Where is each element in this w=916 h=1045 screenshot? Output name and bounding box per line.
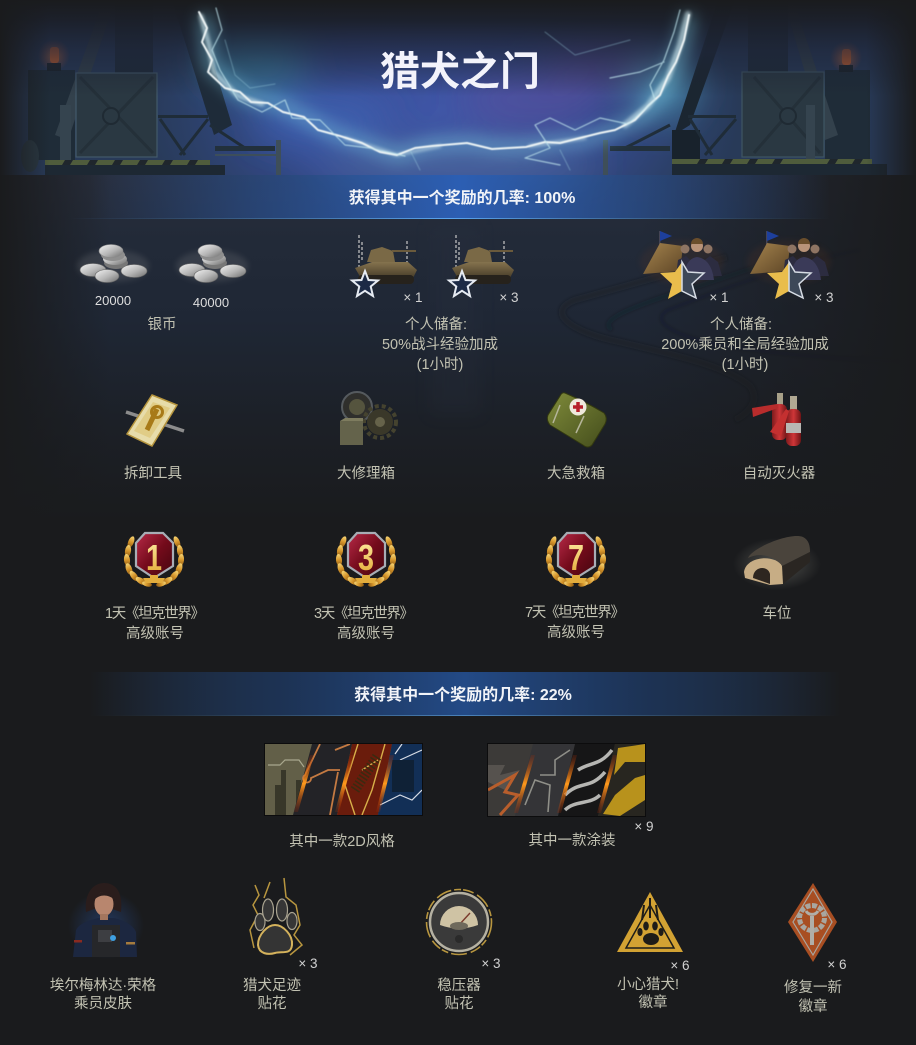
label	[50, 977, 157, 1012]
icon: hangar	[733, 536, 821, 590]
icon: gauge	[426, 890, 492, 954]
label: 小心猎犬!	[617, 976, 679, 993]
label: 猎犬足迹	[243, 977, 301, 994]
label	[617, 976, 679, 1011]
reward: 3 days premium	[314, 533, 414, 642]
label: 高级账号	[337, 625, 395, 642]
reward: 1 day premium	[105, 533, 205, 642]
card frame	[488, 744, 646, 816]
icon: tank reserve x1	[352, 235, 417, 296]
label: 1天《坦克世界》	[105, 605, 205, 622]
portal colour clouds	[200, 24, 697, 179]
left tower	[21, 0, 281, 175]
label: 埃尔梅林达·荣格	[50, 977, 157, 994]
reward: crew skin	[50, 883, 157, 1012]
icon: medal 1: 1	[146, 537, 162, 578]
icon: paw	[250, 878, 302, 955]
hero scene: portal with towers and lightning	[0, 0, 916, 179]
label: 大急救箱	[547, 465, 605, 482]
right tower	[603, 0, 887, 175]
count x9: × 9	[634, 819, 654, 834]
reward: silver coins	[77, 244, 248, 333]
reward: large first aid kit	[547, 393, 606, 482]
card: camouflage swatches	[488, 744, 645, 816]
label: reserve description: (1小时)	[417, 356, 463, 373]
label: reserve description: (1小时)	[722, 356, 768, 373]
banner: 100% reward chance	[70, 175, 830, 219]
count x6: × 6	[670, 958, 690, 973]
label: 稳压器	[437, 977, 481, 994]
count x6: × 6	[827, 957, 847, 972]
label: 7天《坦克世界》	[525, 604, 625, 621]
label	[243, 977, 301, 1012]
left beacon	[38, 39, 70, 71]
icon: wheel, sprocket and box	[340, 392, 396, 445]
reward: garage slot	[733, 536, 821, 622]
label: 车位	[762, 605, 792, 622]
icon: green med bag	[547, 393, 606, 447]
label: reserve description: 200%乘员和全局经验加成	[661, 335, 829, 353]
amount 20000: 20000	[95, 293, 131, 308]
lightning bolts	[199, 8, 689, 170]
icon: ticket and wrench	[126, 395, 184, 446]
star badge	[352, 271, 378, 296]
lightning wisps	[201, 14, 688, 155]
count x3: × 3	[499, 290, 519, 305]
reward: 7 days premium	[525, 533, 625, 641]
star badge half gold	[660, 262, 682, 299]
reward: personal reserve 50% combat XP	[352, 235, 519, 373]
label: 拆卸工具	[124, 465, 182, 482]
label: 贴花	[258, 995, 286, 1012]
card frame	[264, 744, 422, 816]
count x3: × 3	[298, 956, 318, 971]
icon: portrait	[68, 883, 144, 959]
label: reserve description: 50%战斗经验加成	[382, 336, 498, 353]
reward: demounting kit	[124, 395, 184, 482]
label: 乘员皮肤	[74, 995, 132, 1012]
reward: camouflage card	[488, 744, 654, 849]
label: silver: 银币	[148, 316, 176, 333]
vignette over sky	[0, 0, 916, 175]
label	[784, 978, 842, 1015]
label: reserve description: 个人储备:	[405, 316, 467, 333]
hero edge fade right	[866, 0, 916, 175]
reward: beware hound emblem	[617, 892, 690, 1011]
label: 贴花	[444, 995, 474, 1012]
label: 徽章	[638, 993, 668, 1011]
road surface background	[0, 174, 916, 520]
banner: 22% reward chance	[90, 672, 840, 716]
amount 40000: 40000	[193, 295, 229, 310]
label	[105, 605, 205, 642]
count x1: × 1	[709, 290, 729, 305]
label: reserve description: 个人储备:	[710, 316, 772, 333]
label: reserve description	[382, 316, 498, 373]
reward: 2D style card	[264, 744, 422, 850]
hero sky	[0, 0, 916, 175]
reward: hound paw decal	[243, 878, 318, 1012]
icon: coin pile 20000	[77, 244, 149, 282]
reward: automatic fire extinguisher	[743, 393, 816, 482]
title: 猎犬之门	[380, 50, 540, 94]
label	[314, 605, 414, 642]
count x3: × 3	[814, 290, 834, 305]
label: 修复一新	[784, 978, 842, 996]
label	[525, 604, 625, 641]
icon: medal 7: 7	[568, 537, 584, 578]
icon: orange diamond	[788, 883, 837, 962]
lightning glow	[205, 15, 689, 155]
icon: crew reserve x3	[747, 231, 831, 299]
label: 其中一款涂装	[528, 832, 616, 849]
reward: large repair kit	[337, 392, 396, 482]
label: 高级账号	[547, 624, 605, 641]
card: style swatches	[265, 744, 422, 815]
count x1: × 1	[403, 290, 423, 305]
reward: good as new emblem	[784, 883, 847, 1015]
banner: 100% reward chance: 获得其中一个奖励的几率: 100%	[349, 188, 575, 207]
icon: warning triangle	[617, 892, 683, 952]
label: 自动灭火器	[743, 465, 816, 482]
reward: stabilizer decal	[426, 890, 501, 1012]
count x3: × 3	[481, 956, 501, 971]
reward: personal reserve 200% crew XP	[640, 231, 834, 373]
label: 徽章	[798, 997, 828, 1015]
icon: crew reserve x1	[640, 231, 724, 299]
icon: red extinguishers	[752, 393, 801, 446]
icon: coin pile 40000	[176, 244, 248, 282]
label: reserve description	[661, 316, 829, 373]
icon: tank reserve x3	[449, 235, 514, 296]
banner: 22% reward chance: 获得其中一个奖励的几率: 22%	[354, 685, 572, 704]
icon: medal 3: 3	[358, 537, 374, 578]
label: 高级账号	[126, 625, 184, 642]
label: 3天《坦克世界》	[314, 605, 414, 622]
hero edge fade left	[0, 0, 50, 175]
right beacon	[830, 41, 862, 73]
label: 其中一款2D风格	[289, 833, 395, 850]
label	[437, 977, 481, 1012]
label: 大修理箱	[337, 465, 395, 482]
